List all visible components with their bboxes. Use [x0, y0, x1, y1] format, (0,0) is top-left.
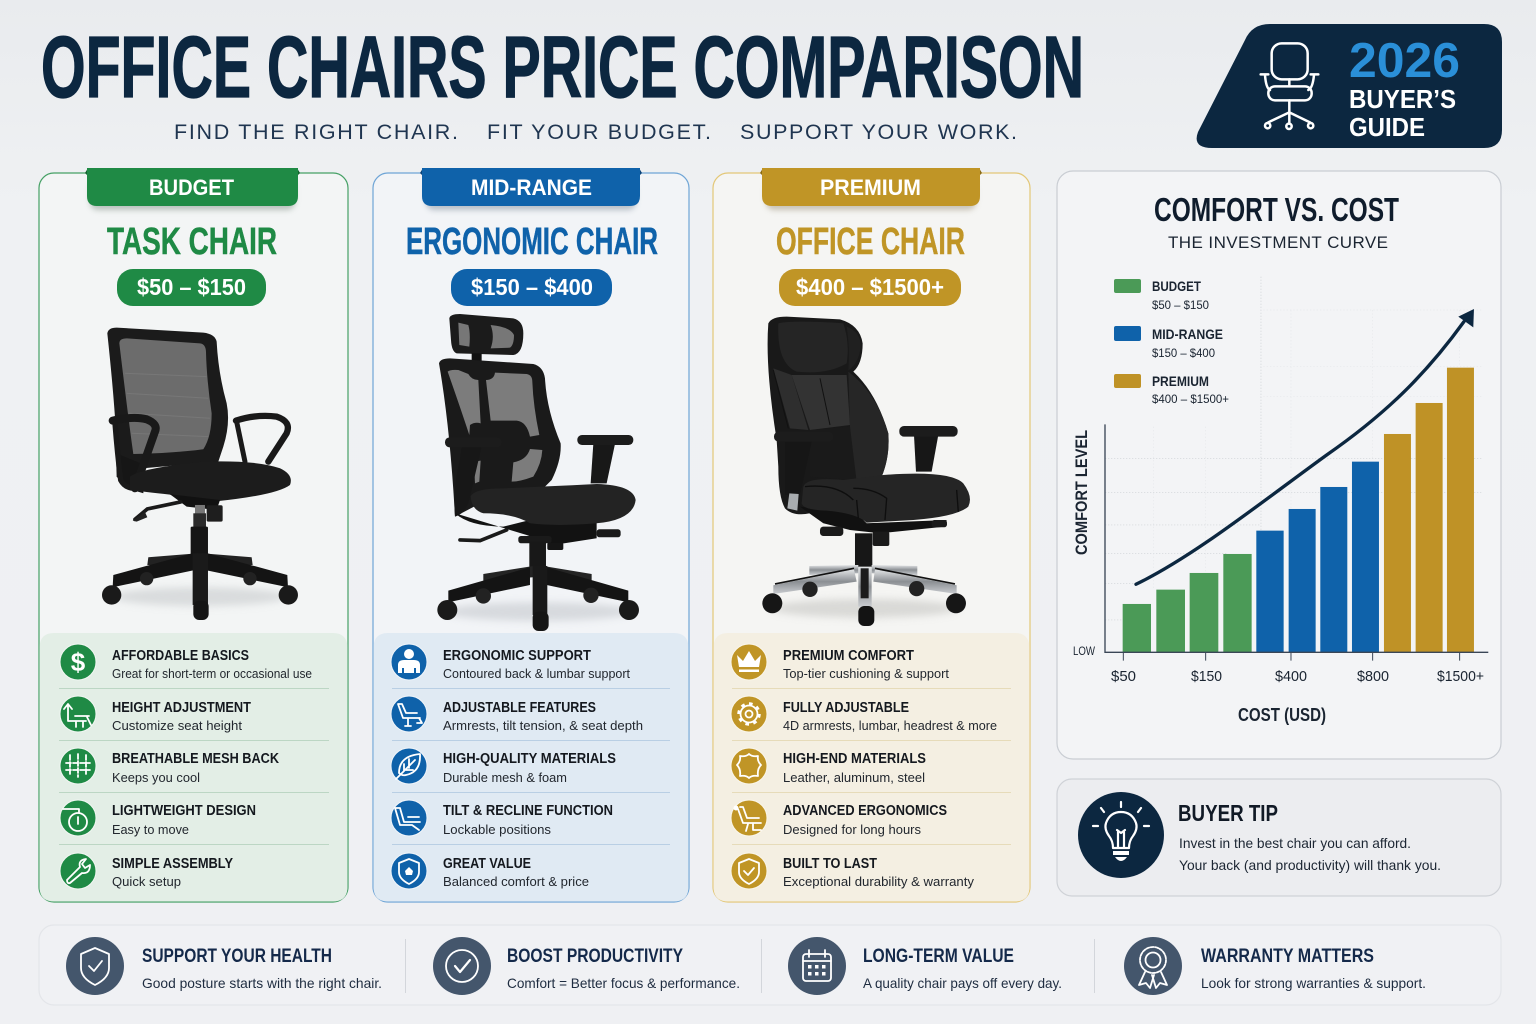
benefit: boost productivity: Comfort = Better focus & performance.: [507, 975, 740, 991]
tip text: Invest in the best chair you can afford.: [1179, 835, 1411, 851]
feature: breathable mesh back: BREATHABLE MESH BACK: [112, 751, 279, 767]
feature: lightweight design: Easy to move: [112, 822, 189, 837]
panel: mid-range ergonomic chair: [373, 168, 689, 902]
feature: great value: [391, 853, 589, 889]
feature: advanced ergonomics: Designed for long hours: [783, 822, 921, 837]
benefit: warranty matters: [1124, 937, 1426, 995]
benefit: support your health: [66, 937, 382, 995]
legend: $150 – $400: [1152, 346, 1215, 360]
feature: breathable mesh back: [60, 748, 279, 785]
legend: MID-RANGE: [1152, 326, 1223, 342]
feature: simple assembly: [60, 853, 233, 889]
chair photo: office chair: [762, 317, 970, 626]
badge: 2026 buyer's guide: BUYER’S: [1349, 84, 1456, 114]
badge text: 2026: [1349, 34, 1460, 88]
legend: PREMIUM: [1152, 373, 1209, 389]
legend: BUDGET: [1152, 278, 1201, 294]
feature: adjustable features: [391, 696, 643, 733]
subtitle: FIND THE RIGHT CHAIR.: [174, 120, 458, 144]
feature: fully adjustable: 4D armrests, lumbar, headrest & more: [783, 718, 997, 733]
icon: dollar: $: [71, 647, 86, 677]
tip text: [1179, 835, 1441, 873]
feature panel background: [374, 633, 688, 901]
price pill: $50 – $150: [137, 274, 246, 300]
feature: great value: Balanced comfort & price: [443, 874, 589, 889]
feature: high-end materials: Leather, aluminum, steel: [783, 770, 925, 785]
benefit: long-term value: LONG-TERM VALUE: [863, 946, 1014, 967]
feature panel background: [714, 633, 1029, 901]
axis labels: [1073, 646, 1484, 685]
ribbon: budget: BUDGET: [149, 175, 235, 200]
benefit: support your health: SUPPORT YOUR HEALTH: [142, 946, 332, 967]
icon: leaf: [391, 748, 427, 784]
feature: affordable basics: [60, 644, 312, 681]
benefit: support your health: Good posture starts with the right chair.: [142, 975, 382, 991]
feature: lightweight design: LIGHTWEIGHT DESIGN: [112, 803, 256, 819]
bar chart: [1105, 277, 1488, 661]
feature: high-quality materials: [391, 748, 616, 785]
x axis title: COST (USD): [1238, 705, 1326, 725]
feature: tilt and recline: [391, 800, 613, 837]
icon: shield check: [731, 853, 767, 889]
icon: reclined chair: [731, 800, 767, 836]
panel: comfort vs cost chart: [1057, 171, 1501, 759]
feature: simple assembly: Quick setup: [112, 874, 181, 889]
subtitle: FIT YOUR BUDGET.: [487, 120, 711, 144]
icon: calendar: [788, 937, 846, 995]
price pill: [451, 269, 612, 306]
ribbon: premium: PREMIUM: [820, 175, 921, 200]
icon: office chair: [1261, 43, 1318, 129]
heading: ERGONOMIC CHAIR: [406, 221, 658, 263]
axis labels: LOW: [1073, 646, 1095, 658]
feature: high-end materials: HIGH-END MATERIALS: [783, 751, 926, 767]
feature: premium comfort: PREMIUM COMFORT: [783, 648, 914, 664]
axis labels: $150: [1191, 668, 1222, 685]
tip heading: BUYER TIP: [1178, 800, 1278, 826]
panel: bottom benefits strip: [39, 925, 1501, 1005]
chair photo: ergonomic chair: [437, 314, 639, 631]
feature: lightweight design: [60, 800, 256, 837]
feature: premium comfort: [731, 644, 949, 681]
subtitle: [174, 120, 1017, 144]
tip text: Your back (and productivity) will thank you.: [1179, 857, 1441, 873]
feature: great value: GREAT VALUE: [443, 856, 531, 872]
feature: high-end materials: [731, 748, 926, 785]
benefit: warranty matters: Look for strong warranties & support.: [1201, 975, 1426, 991]
feature: tilt and recline: Lockable positions: [443, 822, 551, 837]
ribbon: mid-range: [420, 168, 642, 210]
feature: premium comfort: Top-tier cushioning & support: [783, 666, 949, 681]
subtitle: SUPPORT YOUR WORK.: [740, 120, 1017, 144]
feature: affordable basics: Great for short-term or occasional use: [112, 666, 312, 681]
feature: adjustable features: Armrests, tilt tension, & seat depth: [443, 718, 643, 733]
chart title: COMFORT VS. COST: [1154, 191, 1399, 228]
icon: crown: [731, 644, 767, 680]
price pill: $400 – $1500+: [796, 274, 944, 300]
icon: gear: [731, 696, 767, 732]
icon: leather hide: [731, 748, 767, 784]
feature: adjustable features: ADJUSTABLE FEATURES: [443, 700, 596, 716]
price pill: [779, 269, 961, 306]
chart subtitle: THE INVESTMENT CURVE: [1168, 233, 1388, 252]
feature: high-quality materials: Durable mesh & foam: [443, 770, 567, 785]
feature panel background: [40, 633, 347, 901]
feature: fully adjustable: [731, 696, 997, 733]
feature: height adjustment: HEIGHT ADJUSTMENT: [112, 700, 251, 716]
feature: ergonomic support: Contoured back & lumbar support: [443, 666, 630, 681]
feature: affordable basics: AFFORDABLE BASICS: [112, 648, 249, 664]
icon: weight: [60, 800, 96, 836]
legend: $50 – $150: [1152, 298, 1209, 312]
ribbon: budget: [85, 168, 300, 210]
heading: TASK CHAIR: [107, 221, 277, 263]
axis labels: $800: [1357, 668, 1389, 685]
icon: shield: [391, 853, 427, 889]
badge: 2026 buyer's guide: [1197, 24, 1502, 148]
icon: adjustable seat: [391, 696, 427, 732]
icon: dollar: [60, 644, 96, 680]
chair photo: task chair: [102, 328, 298, 620]
feature: built to last: BUILT TO LAST: [783, 856, 877, 872]
feature: advanced ergonomics: ADVANCED ERGONOMICS: [783, 803, 947, 819]
benefit: long-term value: [788, 937, 1062, 995]
badge: 2026 buyer's guide: GUIDE: [1349, 112, 1425, 142]
feature: high-quality materials: HIGH-QUALITY MATERIALS: [443, 751, 616, 767]
icon: light bulb: [1078, 792, 1164, 878]
feature: tilt and recline: TILT & RECLINE FUNCTION: [443, 803, 613, 819]
feature: ergonomic support: ERGONOMIC SUPPORT: [443, 648, 591, 664]
feature: built to last: [731, 853, 975, 889]
icon: ribbon award: [1124, 937, 1182, 995]
axis labels: $50: [1111, 668, 1136, 685]
feature: advanced ergonomics: [731, 800, 947, 837]
axis labels: $400: [1275, 668, 1307, 685]
benefit: boost productivity: BOOST PRODUCTIVITY: [507, 946, 683, 967]
legend: $400 – $1500+: [1152, 392, 1229, 406]
benefit: warranty matters: WARRANTY MATTERS: [1201, 946, 1374, 967]
legend: [1114, 278, 1229, 406]
icon: person: [391, 644, 427, 680]
icon: shield: [66, 937, 124, 995]
y axis title: COMFORT LEVEL: [1073, 430, 1091, 555]
ribbon: mid-range: MID-RANGE: [471, 175, 592, 200]
feature: ergonomic support: [391, 644, 630, 681]
price pill: [117, 269, 266, 306]
feature: height adjustment: [60, 696, 251, 733]
icon: wrench: [60, 853, 96, 889]
benefit: long-term value: A quality chair pays off every day.: [863, 975, 1062, 991]
arrow: investment curve: [1136, 309, 1474, 584]
feature: breathable mesh back: Keeps you cool: [112, 770, 200, 785]
heading: OFFICE CHAIR: [776, 221, 965, 263]
icon: height: [60, 696, 96, 732]
icon: airflow mesh: [60, 748, 96, 784]
panel: budget task chair: [39, 168, 348, 902]
panel: premium office chair: [713, 168, 1030, 902]
feature: simple assembly: SIMPLE ASSEMBLY: [112, 856, 233, 872]
axis labels: $1500+: [1437, 668, 1484, 685]
icon: recline: [391, 800, 427, 836]
feature: built to last: Exceptional durability & warranty: [783, 874, 975, 889]
feature: height adjustment: Customize seat height: [112, 718, 242, 733]
price pill: $150 – $400: [471, 274, 593, 300]
feature: fully adjustable: FULLY ADJUSTABLE: [783, 700, 909, 716]
ribbon: premium: [760, 168, 982, 210]
benefit: boost productivity: [433, 937, 740, 995]
icon: check circle: [433, 937, 491, 995]
panel: buyer tip: [1057, 779, 1501, 896]
